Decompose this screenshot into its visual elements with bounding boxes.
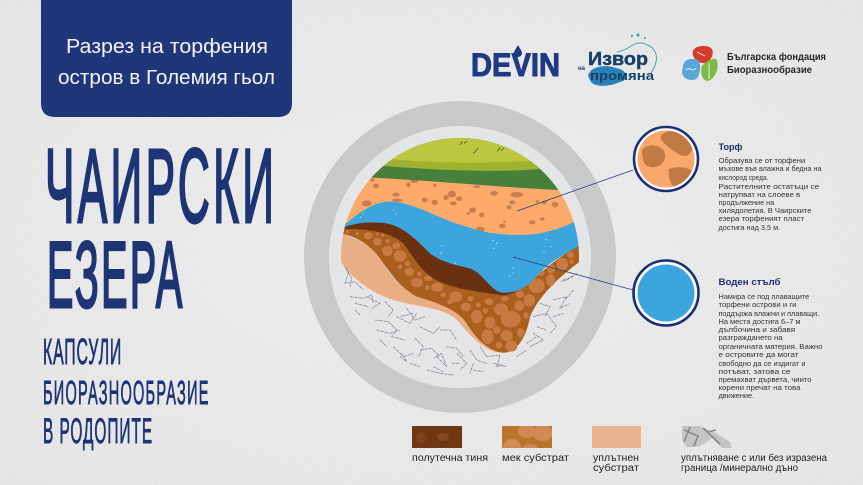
water text block: движение.	[718, 391, 754, 400]
logo: Извор на промяна: на	[578, 66, 586, 72]
water text block: органичната материя. Важно	[718, 342, 822, 351]
legend: compaction / mineral bottom	[681, 426, 827, 474]
logo: Извор на промяна	[578, 33, 656, 86]
water text block: торфени острови и ги	[718, 300, 796, 309]
grass layer	[371, 138, 558, 190]
logo: Българска фондация Биоразнообразие	[682, 46, 826, 81]
legend: soft substrate: мек субстрат	[502, 452, 569, 464]
water text block: корени пречат на това	[718, 383, 801, 392]
subtitle: БИОРАЗНООБРАЗИЕ	[43, 376, 208, 412]
subtitle: В РОДОПИТЕ	[43, 412, 152, 451]
compact substrate	[333, 232, 503, 353]
water text block: Намира се под плаващите	[718, 292, 809, 301]
water text block: поддържа влажни и плаващи.	[718, 309, 819, 318]
pointer line: water	[513, 257, 633, 290]
water text block: разграждането на	[718, 333, 783, 342]
water text block: е островите да могат	[718, 350, 799, 359]
heading panel: остров в Големия гьол	[58, 67, 275, 89]
legend: compact substrate: субстрат	[593, 462, 639, 474]
mineral bottom cracks	[342, 260, 577, 375]
peat text block	[718, 142, 822, 232]
peat text block: кислород среда.	[718, 173, 768, 182]
water text block: Воден стълб	[718, 277, 781, 288]
peat layer	[333, 177, 587, 248]
legend: compact substrate	[592, 426, 641, 474]
legend: compaction / mineral bottom: уплътняване с или без изразена	[681, 452, 827, 464]
water text block	[718, 277, 822, 400]
water text block: премахват дървета, чиито	[718, 375, 812, 384]
peat text block: достига над 3,5 м.	[718, 223, 780, 232]
peat text block: езера торфеният пласт	[718, 214, 805, 223]
water text block: свободно да се издигат и	[718, 359, 806, 368]
title: ЧАИРСКИ	[45, 128, 274, 245]
peat text block: мъхове във влажна и бедна на	[718, 164, 822, 173]
heading panel: Разрез на торфения	[66, 36, 268, 58]
icon: water detail circle	[634, 260, 698, 326]
peat text block: Торф	[718, 142, 742, 153]
logo: Българска фондация Биоразнообразие: Българска фондация	[727, 51, 826, 63]
peat text block: Образува се от торфени	[718, 156, 805, 165]
legend: compaction / mineral bottom: граница /минерално дъно	[681, 463, 798, 474]
legend: semi-liquid mud: полутечна тиня	[412, 453, 488, 464]
peat text block: натрупват на слоеве в	[718, 190, 800, 199]
subtitle	[43, 332, 208, 451]
water column	[342, 202, 587, 293]
title: ЕЗЕРА	[47, 224, 182, 328]
logo: Българска фондация Биоразнообразие: Биоразнообразие	[727, 64, 812, 76]
logo: Devin: DEVIN	[471, 47, 560, 83]
cross-section circle	[304, 101, 616, 413]
semi-liquid mud	[343, 220, 520, 295]
peat text block: Растителните остатъци се	[718, 182, 819, 191]
soft substrate	[333, 227, 587, 353]
logo: Извор на промяна: промяна	[590, 68, 655, 83]
peat text block: продължение на	[718, 198, 775, 207]
title	[45, 128, 274, 328]
heading panel	[41, 0, 292, 117]
peat text block: хилядолетия. В Чаирските	[718, 206, 812, 215]
water text block: дълбочина и забавя	[718, 325, 795, 334]
water text block: потъват, затова се	[718, 367, 790, 376]
icon: peat detail circle	[634, 127, 698, 191]
pointer line: peat	[517, 170, 633, 211]
logo: Извор на промяна: Извор	[588, 49, 648, 69]
subtitle: КАПСУЛИ	[43, 332, 121, 372]
legend: compact substrate: уплътнен	[593, 453, 639, 464]
legend: soft substrate	[502, 424, 569, 464]
water text block: На места достига 6–7 м	[718, 317, 800, 326]
legend: semi-liquid mud	[412, 426, 488, 464]
